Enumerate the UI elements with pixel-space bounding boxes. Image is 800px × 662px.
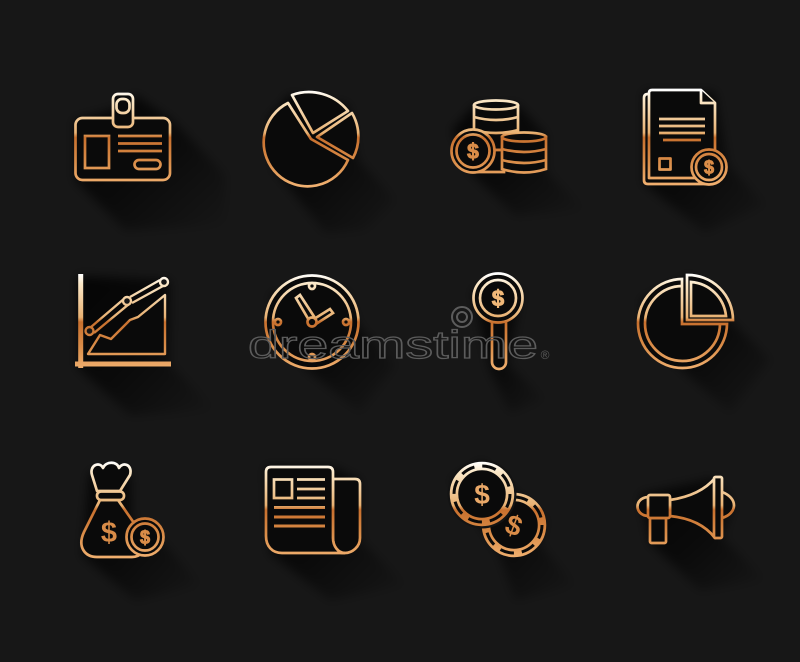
front stack bands [502,149,546,163]
coin [126,518,164,556]
main inner ring [645,286,720,361]
body lines [274,508,325,526]
lower back stack [474,150,504,172]
icon: clock [266,276,358,368]
icon: magnifier with dollar [474,274,522,369]
coin inner ring [132,524,158,550]
icon: money bag with coin [81,463,164,557]
handle [650,518,666,543]
bell rim [714,477,722,538]
dollar sign: $ [467,140,479,164]
lens inner [480,280,516,316]
back sheet [644,94,705,184]
area chart [88,295,165,354]
icon: pie chart with two slices [264,92,358,186]
hour ticks [275,283,349,360]
coin inner ring [696,154,722,180]
quarter slice [687,275,733,320]
icon: megaphone [638,477,734,543]
icon: casino chips [448,460,542,553]
icon: pie chart with quarter [638,275,733,368]
long shadows [75,92,770,600]
front right stack [502,137,546,172]
rear cap [638,497,648,516]
back roll [333,479,360,553]
bag body [81,500,146,557]
watermark spiral [452,307,472,327]
photo [274,480,292,498]
front chip: $ [474,479,490,510]
watermark [248,307,550,367]
text lines [659,119,705,140]
front sheet [649,90,715,178]
back chip: $ [501,508,527,543]
body [648,495,670,518]
icon: id badge [76,94,170,180]
photo frame [85,136,109,168]
text lines [118,136,162,151]
icon: newspaper [266,467,360,553]
square mark [660,158,670,170]
back stack top [474,100,518,110]
corner fold [701,90,715,103]
axes [75,274,171,368]
top slice [292,92,348,133]
main circle [638,279,727,368]
badge clip [113,94,133,127]
trend line [91,280,163,333]
watermark: dreamstime [248,324,538,367]
headline lines [297,480,325,498]
coin [692,150,726,184]
dollar sign: $ [492,286,504,311]
clock hands [296,295,333,324]
back dome [722,492,734,518]
chip separator [448,460,516,528]
handle [492,320,506,369]
right slice [317,113,358,158]
quarter inner line [691,282,726,316]
dollar sign: $ [704,158,714,178]
main slice [264,103,348,186]
back stack bands [474,117,518,133]
clip hole [116,99,130,113]
dollar coin [452,130,494,172]
tie band [97,492,124,500]
center pin [308,318,316,326]
back stack [474,105,518,150]
icon: line chart [75,274,171,368]
coin dollar: $ [140,528,150,548]
registered mark: ® [541,348,550,362]
front stack top [502,132,546,142]
data points [86,278,168,335]
icon: document with coin [644,90,726,184]
dollar sign: $ [101,517,117,549]
lens outer [474,274,522,322]
cone [670,478,715,538]
inner ring [273,283,351,361]
pill button [134,160,160,169]
bag neck [91,463,131,491]
front page [266,467,345,553]
coin inner ring [456,134,490,168]
icon: coin stacks [452,100,546,172]
